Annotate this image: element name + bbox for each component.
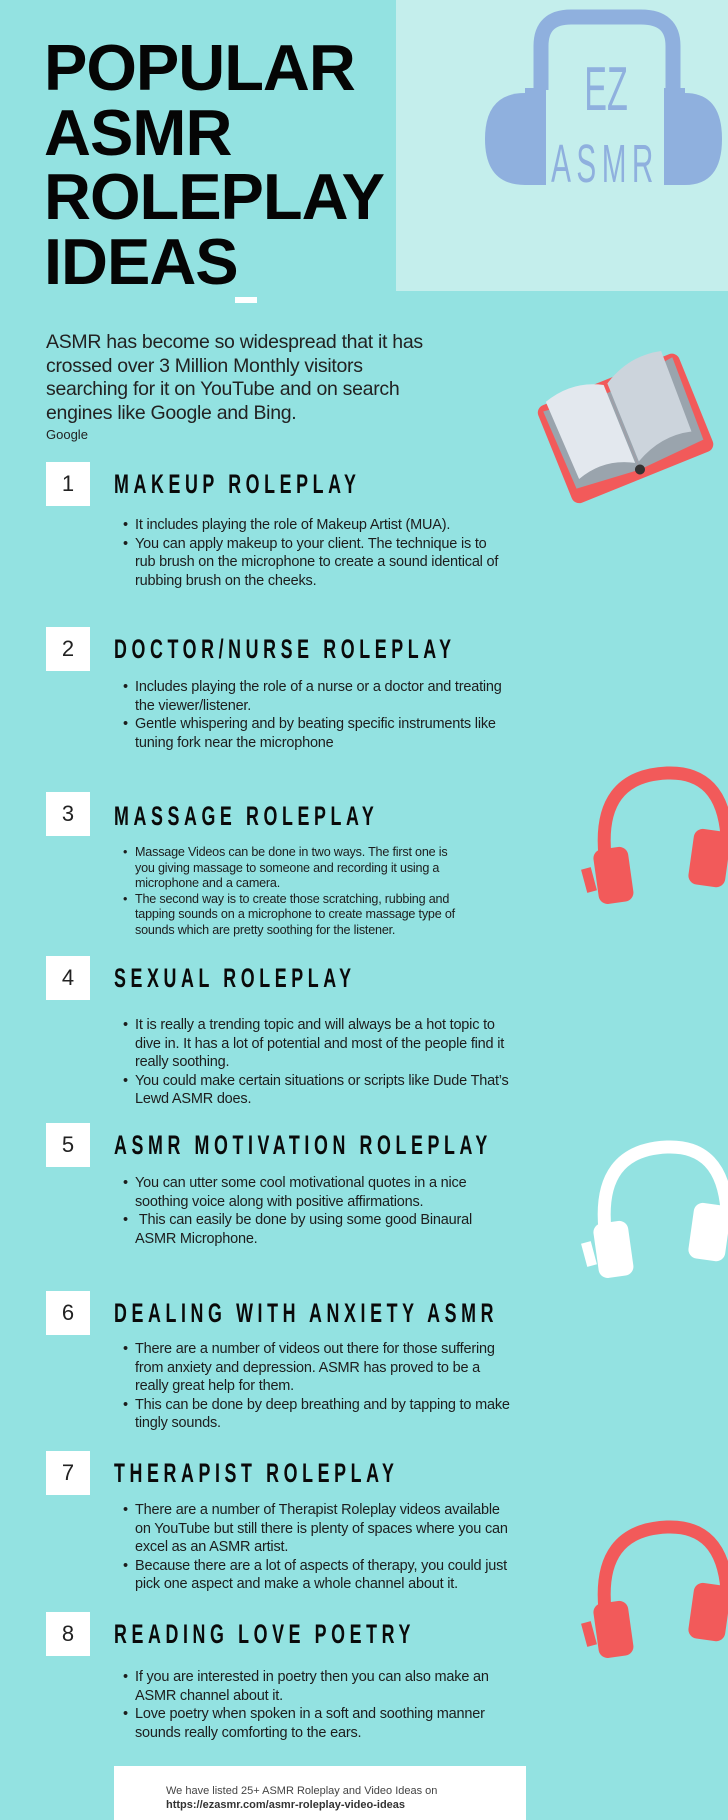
icon: red headphones 2	[581, 1520, 728, 1658]
section 6: 6	[62, 1300, 74, 1325]
text: READING LOVE POETRY	[114, 1619, 415, 1649]
section 8: 8	[62, 1621, 74, 1646]
intro text: engines like Google and Bing.	[46, 402, 296, 424]
section 5	[46, 1123, 90, 1167]
text: Gentle whispering and by beating specific instruments like tuning fork near the microphone	[135, 716, 496, 750]
section 5: 5	[62, 1132, 74, 1157]
white dash	[235, 297, 257, 303]
section 3: 3	[62, 801, 74, 826]
icon: white headphones	[581, 1140, 728, 1278]
text: SEXUAL ROLEPLAY	[114, 963, 356, 993]
text: ASMR MOTIVATION ROLEPLAY	[114, 1130, 492, 1160]
text: There are a number of Therapist Roleplay videos available on YouTube but still there is plenty of spaces where you can excel as an ASMR artist.	[135, 1502, 508, 1555]
icon: open book	[538, 351, 714, 504]
source label: Google	[46, 427, 88, 442]
intro text: searching for it on YouTube and on search	[46, 378, 399, 400]
section 4	[46, 956, 90, 1000]
section 4: 4	[62, 965, 74, 990]
section 2	[46, 627, 90, 671]
icon: EZ ASMR headphones logo: ASMR	[551, 135, 659, 194]
text: It includes playing the role of Makeup Artist (MUA).	[135, 517, 450, 533]
section 7: 7	[62, 1460, 74, 1485]
text: THERAPIST ROLEPLAY	[114, 1458, 398, 1488]
title: IDEAS	[44, 224, 238, 298]
section 6	[46, 1291, 90, 1335]
icon: red headphones 1	[581, 766, 728, 904]
footer box: https://ezasmr.com/asmr-roleplay-video-ideas	[166, 1799, 405, 1811]
text: Massage Videos can be done in two ways. The first one is you giving massage to someone and recording it using a microphone and a camera.	[135, 845, 447, 890]
text: You can apply makeup to your client. The technique is to rub brush on the microphone to create a sound identical of rubbing brush on the cheeks.	[135, 536, 498, 588]
intro text	[46, 331, 423, 424]
text: You could make certain situations or scripts like Dude That’s Lewd ASMR does.	[135, 1072, 509, 1107]
title	[44, 31, 384, 298]
section 3	[46, 792, 90, 836]
text: It is really a trending topic and will always be a hot topic to dive in. It has a lot of potential and most of the people find it really soothing.	[135, 1017, 504, 1070]
intro text: ASMR has become so widespread that it has	[46, 331, 423, 353]
icon: EZ ASMR headphones logo: EZ	[584, 54, 628, 124]
section 7	[46, 1451, 90, 1495]
text: The second way is to create those scratching, rubbing and tapping sounds on a microphone to create massage type of sounds which are pretty soothing for the listener.	[135, 892, 455, 936]
footer box	[114, 1766, 526, 1820]
title: ASMR	[44, 96, 231, 168]
section 1	[46, 462, 90, 506]
text: Because there are a lot of aspects of therapy, you could just pick one aspect and make a whole channel about it.	[135, 1558, 507, 1592]
footer box: We have listed 25+ ASMR Roleplay and Video Ideas on	[166, 1785, 437, 1797]
title: ROLEPLAY	[44, 160, 384, 233]
text: DEALING WITH ANXIETY ASMR	[114, 1298, 498, 1328]
text: DOCTOR/NURSE ROLEPLAY	[114, 634, 456, 664]
text: You can utter some cool motivational quotes in a nice soothing voice along with positive affirmations.	[135, 1175, 466, 1210]
section 1: 1	[62, 471, 74, 496]
intro text: crossed over 3 Million Monthly visitors	[46, 354, 363, 376]
text: There are a number of videos out there for those suffering from anxiety and depression. ASMR has proved to be a really great help for them.	[135, 1341, 495, 1394]
section 8	[46, 1612, 90, 1656]
title: POPULAR	[44, 31, 355, 104]
text: If you are interested in poetry then you can also make an ASMR channel about it.	[135, 1669, 489, 1704]
text: Love poetry when spoken in a soft and soothing manner sounds really comforting to the ears.	[135, 1706, 485, 1740]
logo panel	[396, 0, 728, 291]
text: This can easily be done by using some good Binaural ASMR Microphone.	[135, 1212, 472, 1246]
text: MAKEUP ROLEPLAY	[114, 469, 361, 499]
text: MASSAGE ROLEPLAY	[114, 801, 378, 831]
text: Includes playing the role of a nurse or a doctor and treating the viewer/listener.	[135, 679, 502, 714]
icon: EZ ASMR headphones logo	[485, 10, 722, 194]
section 2: 2	[62, 636, 74, 661]
text: This can be done by deep breathing and by tapping to make tingly sounds.	[135, 1396, 510, 1431]
